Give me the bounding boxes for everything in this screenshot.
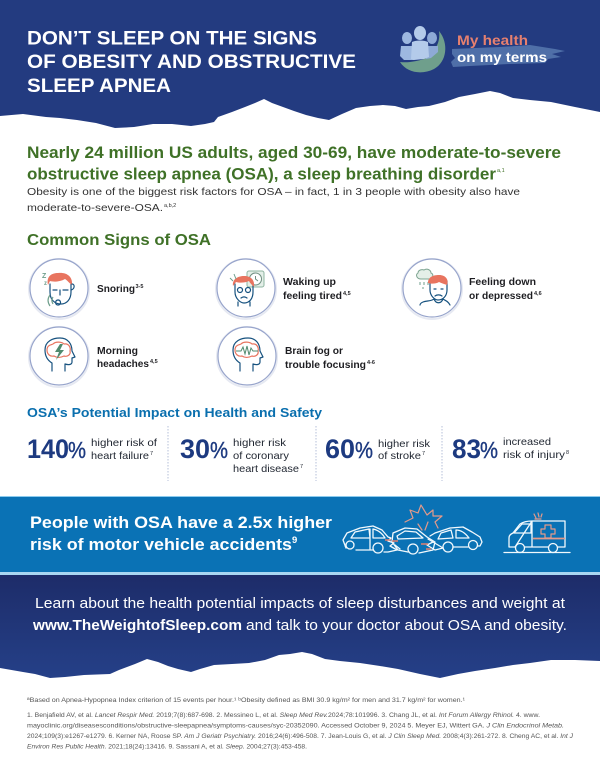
icon: ambulance: [504, 513, 570, 552]
logo text: My health: [457, 32, 528, 48]
stat: stroke: of stroke: [378, 450, 421, 462]
stat: stroke: 7: [422, 451, 425, 457]
title: DON’T SLEEP ON THE SIGNS: [27, 28, 317, 50]
snore z letters: z: [44, 281, 47, 287]
label: Snoring: [97, 284, 135, 295]
label: Feeling down: [469, 277, 536, 288]
call to action: [32, 596, 567, 634]
label: or depressed: [469, 291, 533, 302]
label: Brain fog or: [285, 346, 343, 357]
intro text: moderate-to-severe-OSA.: [27, 202, 163, 214]
snore z letters: Z: [42, 273, 47, 280]
sign: waking up tired: 4,5: [343, 291, 351, 297]
references: Environ Res Public Health. 2021;18(24):13416. 9. Sassani A, et al. Sleep. 2004;27(3):453-458.: [27, 744, 307, 750]
snore z letters: [42, 273, 47, 287]
stat: heart failure: %: [68, 437, 86, 463]
footer banner with torn edge: [0, 575, 600, 678]
sign: feeling down: 4,6: [534, 291, 542, 297]
sign: snoring: [29, 259, 143, 319]
stat: coronary heart disease: [180, 434, 303, 475]
stat: stroke: [325, 434, 431, 464]
label: trouble focusing: [285, 360, 366, 371]
title: SLEEP APNEA: [27, 76, 171, 97]
label: Morning: [97, 346, 138, 357]
icon: head with brain waves: [217, 327, 277, 387]
sign: brain fog: 4-6: [367, 360, 375, 366]
logo brush stroke: [451, 45, 565, 67]
stat: coronary heart disease: of coronary: [233, 450, 290, 462]
references: 2024;109(3):e1267-e1279. 6. Kerner NA, Roose SP. Am J Geriatr Psychiatry. 2016;24(6):496-508. 7. Jean-Louis G, et al. J Clin Sleep Med. 2008;4(3):261-272. 8. Cheng AC, et al. Int J: [27, 733, 574, 740]
stat: heart failure: 7: [150, 451, 153, 457]
band text: risk of motor vehicle accidents: [30, 536, 292, 554]
call to action: and talk to your doctor about OSA and obesity.: [246, 618, 567, 634]
icon: sad person with rain cloud: [402, 259, 462, 319]
label: feeling tired: [283, 291, 342, 302]
stat: injury: risk of injury: [503, 449, 566, 461]
heading: common signs: Common Signs of OSA: [27, 232, 211, 249]
stat: heart failure: higher risk of: [91, 437, 157, 449]
icon: car crash: [343, 505, 482, 554]
label: headaches: [97, 359, 149, 370]
sign: morning headaches: [29, 327, 158, 387]
stat: coronary heart disease: 7: [300, 464, 303, 470]
header banner with torn edge: [0, 0, 600, 128]
stat: coronary heart disease: 30: [180, 434, 210, 464]
stat: injury: 8: [566, 450, 569, 456]
icon: head with lightning: [29, 327, 89, 387]
sign: feeling down: [402, 259, 542, 319]
logo icon: three people and hand: [400, 26, 445, 72]
stat: injury: %: [480, 437, 498, 463]
band text: People with OSA have a 2.5x higher: [30, 514, 333, 532]
icon: tired face with clock: [216, 259, 276, 319]
sign: morning headaches: 4,5: [150, 359, 158, 365]
references: mayoclinic.org/diseasesconditions/obstructive-sleepapnea/symptoms-causes/syc-20352090. Accessed October 9, 2024 5. Meyer EJ, Wittert GA. J Clin Endocrinol Metab.: [27, 722, 564, 730]
stat: coronary heart disease: higher risk: [233, 437, 287, 449]
references: 1. Benjafield AV, et al. Lancet Respir Med. 2019;7(8):687-698. 2. Messineo L, et al. Sleep Med Rev. 2024;78:101996. 3. Chang JL, et al. Int Forum Allergy Rhinol. 4. www.: [27, 712, 540, 719]
band text: [30, 514, 333, 554]
sign: snoring: 3-5: [136, 284, 143, 290]
stat: coronary heart disease: heart disease: [233, 463, 299, 475]
logo: My health on my terms: [400, 26, 565, 72]
sign: brain fog: [217, 327, 375, 387]
title: [27, 28, 356, 97]
stat: heart failure: 140: [27, 434, 69, 464]
dividers: [168, 426, 442, 481]
intro text: Obesity is one of the biggest risk factors for OSA – in fact, 1 in 3 people with obesity also have: [27, 186, 520, 198]
stat: stroke: %: [355, 437, 373, 463]
band: motor vehicle accidents: [0, 496, 600, 576]
footnotes: ªBased on Apnea-Hypopnea Index criterion of 15 events per hour.¹ ᵇObesity defined as BMI 30.9 kg/m² for men and 31.7 kg/m² for women.¹: [27, 697, 465, 704]
stat: heart failure: [27, 434, 157, 464]
call to action: Learn about the health potential impacts of sleep disturbances and weight at: [35, 596, 565, 612]
icon: snoring face: [29, 259, 89, 319]
heading: health impact: OSA’s Potential Impact on Health and Safety: [27, 405, 323, 420]
stat: coronary heart disease: %: [210, 437, 228, 463]
references: [27, 712, 574, 750]
footnotes: [27, 697, 574, 750]
stat: injury: increased: [503, 436, 551, 448]
headline: a,1: [497, 168, 505, 174]
intro text: a,b,2: [164, 203, 176, 209]
stat: stroke: higher risk: [378, 438, 431, 450]
stat: heart failure: heart failure: [91, 450, 149, 462]
call to action: www.TheWeightofSleep.com: [32, 618, 242, 634]
title: OF OBESITY AND OBSTRUCTIVE: [27, 52, 356, 73]
label: Waking up: [283, 277, 336, 288]
stat: stroke: 60: [325, 434, 355, 464]
stat: injury: 83: [452, 434, 481, 464]
stat: injury: [452, 434, 569, 464]
headline: Nearly 24 million US adults, aged 30-69, have moderate-to-severe: [27, 143, 561, 162]
logo: My health on my terms: on my terms: [457, 49, 547, 65]
headline: obstructive sleep apnea (OSA), a sleep breathing disorder: [27, 164, 496, 184]
band text: 9: [292, 535, 297, 546]
headline: [27, 143, 561, 184]
intro text: [27, 186, 520, 214]
sign: waking up tired: [216, 259, 351, 319]
